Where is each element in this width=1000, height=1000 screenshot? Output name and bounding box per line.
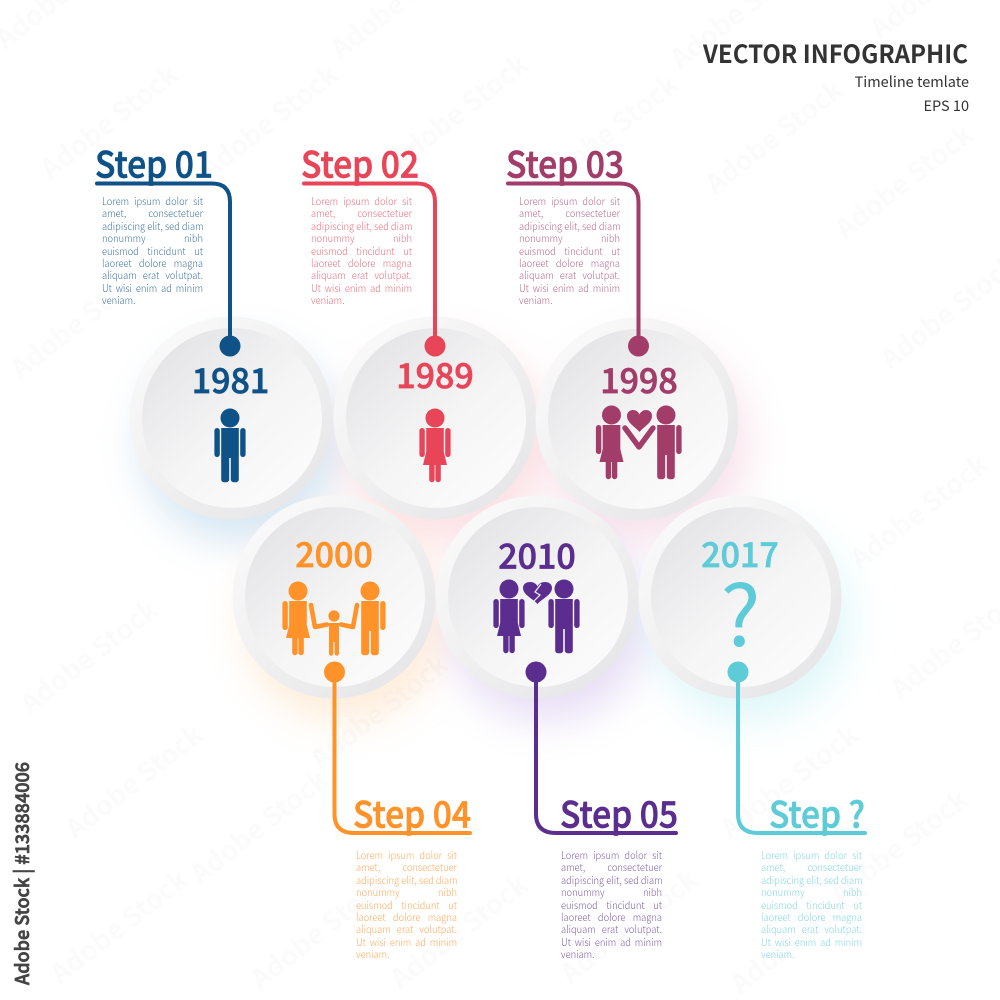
text block: step 01: nonummy nibh: [102, 231, 203, 246]
text block: step 03: adipiscing elit, sed diam: [519, 219, 621, 234]
text block: step 05: aliquam erat volutpat.: [561, 922, 662, 937]
text block: step 03: laoreet dolore magna: [519, 256, 620, 271]
text block: step ?: Lorem ipsum dolor sit: [761, 848, 862, 863]
text block: step 02: Ut wisi enim ad minim: [311, 281, 412, 296]
stock credit: Adobe Stock | #133884006: [8, 762, 35, 985]
text block: step 03: [519, 194, 621, 308]
text block: step 02: veniam.: [311, 293, 344, 308]
year: 1981: 1981: [192, 354, 269, 403]
text block: step 05: Ut wisi enim ad minim: [561, 935, 662, 950]
text block: step 02: Lorem ipsum dolor sit: [311, 194, 412, 209]
text block: step 04: aliquam erat volutpat.: [356, 922, 457, 937]
text block: step 04: nonummy nibh: [356, 885, 457, 900]
text block: step 05: laoreet dolore magna: [561, 910, 662, 925]
text block: step 03: veniam.: [519, 293, 552, 308]
circle: 1989: [334, 316, 536, 520]
connector: step 02: [304, 184, 446, 356]
year: 1998: 1998: [600, 354, 678, 403]
circle: 1998: [536, 318, 738, 520]
text block: step 02: aliquam erat volutpat.: [311, 268, 412, 283]
text block: step 01: amet, consectetuer: [102, 206, 203, 221]
text block: step 05: [561, 848, 663, 962]
text block: step ?: [761, 848, 863, 962]
text block: step 01: Lorem ipsum dolor sit: [102, 194, 203, 209]
text block: step 02: euismod tincidunt ut: [311, 244, 412, 259]
heading: step 03: Step 03: [506, 136, 624, 188]
text block: step 02: [311, 194, 413, 308]
text block: step ?: veniam.: [761, 947, 794, 962]
text block: step 04: Ut wisi enim ad minim: [356, 935, 457, 950]
icon: separated couple with broken heart: [493, 580, 580, 653]
text block: step 03: euismod tincidunt ut: [519, 244, 620, 259]
text block: step 04: [356, 848, 458, 962]
format note: EPS 10: [923, 95, 969, 116]
connector: step 03: [508, 184, 649, 356]
circle: 2010: [436, 496, 638, 698]
text block: step 04: amet, consectetuer: [356, 860, 457, 875]
text block: step 03: aliquam erat volutpat.: [519, 268, 620, 283]
icon: couple with heart: [596, 406, 682, 479]
coloured circle shadows: [140, 342, 850, 721]
text block: step 05: nonummy nibh: [561, 885, 662, 900]
connector: step 04: [324, 662, 470, 833]
icon: family: [282, 582, 386, 656]
text block: step 01: Ut wisi enim ad minim: [102, 281, 203, 296]
text block: step 04: adipiscing elit, sed diam: [356, 873, 458, 888]
text block: step ?: Ut wisi enim ad minim: [761, 935, 862, 950]
text block: step ?: nonummy nibh: [761, 885, 862, 900]
heading: step 02: Step 02: [301, 136, 419, 188]
text block: step 01: veniam.: [102, 293, 135, 308]
text block: step 02: adipiscing elit, sed diam: [311, 219, 413, 234]
text block: step 01: euismod tincidunt ut: [102, 244, 203, 259]
heading: step 01: Step 01: [95, 136, 213, 188]
text block: step 02: nonummy nibh: [311, 231, 412, 246]
text block: step ?: adipiscing elit, sed diam: [761, 873, 863, 888]
text block: step 05: amet, consectetuer: [561, 860, 662, 875]
connector: step 05: [526, 662, 676, 833]
text block: step 04: euismod tincidunt ut: [356, 898, 457, 913]
subtitle: Timeline temlate: [855, 71, 969, 92]
text block: step 04: laoreet dolore magna: [356, 910, 457, 925]
circle: 2000: [232, 496, 436, 698]
connector: step ?: [728, 662, 865, 833]
year: 2010: 2010: [498, 530, 576, 578]
text block: step ?: euismod tincidunt ut: [761, 898, 862, 913]
text block: step 03: nonummy nibh: [519, 231, 620, 246]
text block: step 01: [102, 194, 204, 308]
heading: step ?: Step ?: [769, 786, 865, 838]
text block: step ?: laoreet dolore magna: [761, 910, 862, 925]
text block: step 03: Ut wisi enim ad minim: [519, 281, 620, 296]
heading: step 05: Step 05: [560, 786, 678, 838]
year: 1989: 1989: [396, 349, 474, 398]
year: 2017: 2017: [701, 528, 779, 577]
text block: step 05: veniam.: [561, 947, 594, 962]
text block: step 05: euismod tincidunt ut: [561, 898, 662, 913]
icon: woman: [419, 408, 451, 482]
text block: step 01: laoreet dolore magna: [102, 256, 203, 271]
text block: step 04: veniam.: [356, 947, 389, 962]
title: VECTOR INFOGRAPHIC: [702, 35, 968, 71]
circle: 2017: [638, 496, 842, 698]
text block: step 05: adipiscing elit, sed diam: [561, 873, 663, 888]
text block: step ?: amet, consectetuer: [761, 860, 862, 875]
connector: step 01: [97, 184, 240, 356]
heading: step 04: Step 04: [353, 786, 471, 838]
text block: step 02: laoreet dolore magna: [311, 256, 412, 271]
text block: step 01: aliquam erat volutpat.: [102, 268, 203, 283]
circle: 1981: [130, 316, 332, 520]
icon: man: [214, 408, 246, 482]
text block: step 02: amet, consectetuer: [311, 206, 412, 221]
text block: step 01: adipiscing elit, sed diam: [102, 219, 204, 234]
year: 2000: 2000: [295, 528, 373, 577]
text block: step 04: Lorem ipsum dolor sit: [356, 848, 457, 863]
text block: step 03: Lorem ipsum dolor sit: [519, 194, 620, 209]
text block: step 03: amet, consectetuer: [519, 206, 620, 221]
text block: step ?: aliquam erat volutpat.: [761, 922, 862, 937]
text block: step 05: Lorem ipsum dolor sit: [561, 848, 662, 863]
icon: question mark: ?: [721, 550, 760, 671]
